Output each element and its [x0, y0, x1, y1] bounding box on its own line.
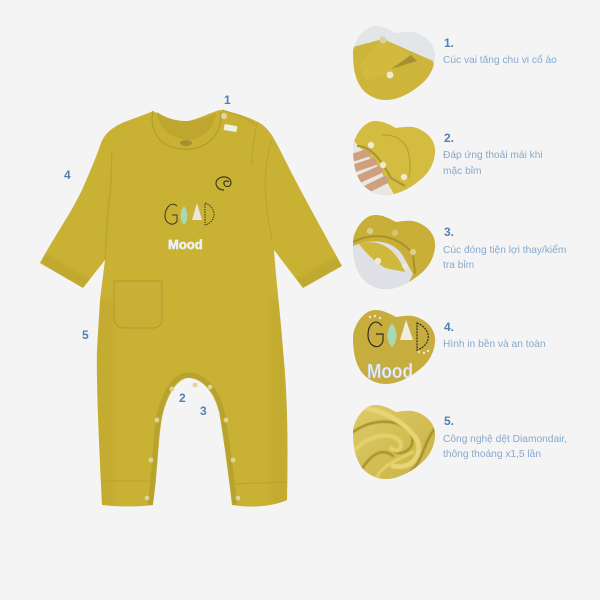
- description 3: Cúc đóng tiện lợi thay/kiểm: [443, 244, 566, 256]
- callout numbers: [64, 93, 231, 418]
- chest logo: [216, 177, 231, 190]
- shoulder placket seam: [222, 110, 272, 240]
- heading 1: 1.: [444, 36, 454, 50]
- description 1: Cúc vai tăng chu vi cổ áo: [443, 54, 557, 66]
- print: good mood: [165, 203, 214, 252]
- description 5: Công nghệ dệt Diamondair,: [443, 434, 567, 445]
- heart image 4: [353, 309, 437, 385]
- heading 2: 2.: [444, 131, 454, 145]
- heart image 4: Mood: [367, 361, 413, 383]
- inner back neck: [157, 112, 216, 140]
- callout numbers: 2: [179, 391, 186, 405]
- description 4: Hình in bền và an toàn: [443, 338, 546, 350]
- collar: [152, 111, 221, 149]
- feature 5: [353, 404, 567, 482]
- crotch snaps: [145, 383, 240, 500]
- heart image 5: [353, 404, 437, 482]
- description 5: thông thoáng x1,5 lần: [443, 448, 541, 460]
- callout numbers: 1: [224, 93, 231, 107]
- garment shading: [40, 254, 342, 505]
- crotch placket: [150, 375, 235, 505]
- feature 4: [353, 309, 546, 385]
- heart image 1: [353, 25, 437, 101]
- shoulder button: [221, 113, 227, 119]
- heading 5: 5.: [444, 414, 454, 428]
- description 2: Đáp ứng thoải mái khi: [443, 150, 543, 161]
- pocket: [114, 281, 162, 328]
- description 2: mặc bỉm: [443, 165, 482, 177]
- heart image 3: [353, 214, 437, 290]
- heading 3: 3.: [444, 225, 454, 239]
- garment body: [40, 110, 342, 507]
- feature 3: [353, 214, 566, 290]
- romper garment: [40, 110, 342, 507]
- print: good mood: Mood: [168, 237, 203, 252]
- description 3: tra bỉm: [443, 259, 474, 271]
- heart image 2: [353, 120, 437, 196]
- shoulder tag: [224, 124, 237, 132]
- neck label: [180, 140, 192, 146]
- callout numbers: 5: [82, 328, 89, 342]
- left sleeve seam: [105, 150, 112, 260]
- callout numbers: 4: [64, 168, 71, 182]
- callout numbers: 3: [200, 404, 207, 418]
- feature 1: [353, 25, 557, 101]
- leg cuffs: [102, 481, 287, 484]
- feature 2: [353, 120, 543, 196]
- heading 4: 4.: [444, 320, 454, 334]
